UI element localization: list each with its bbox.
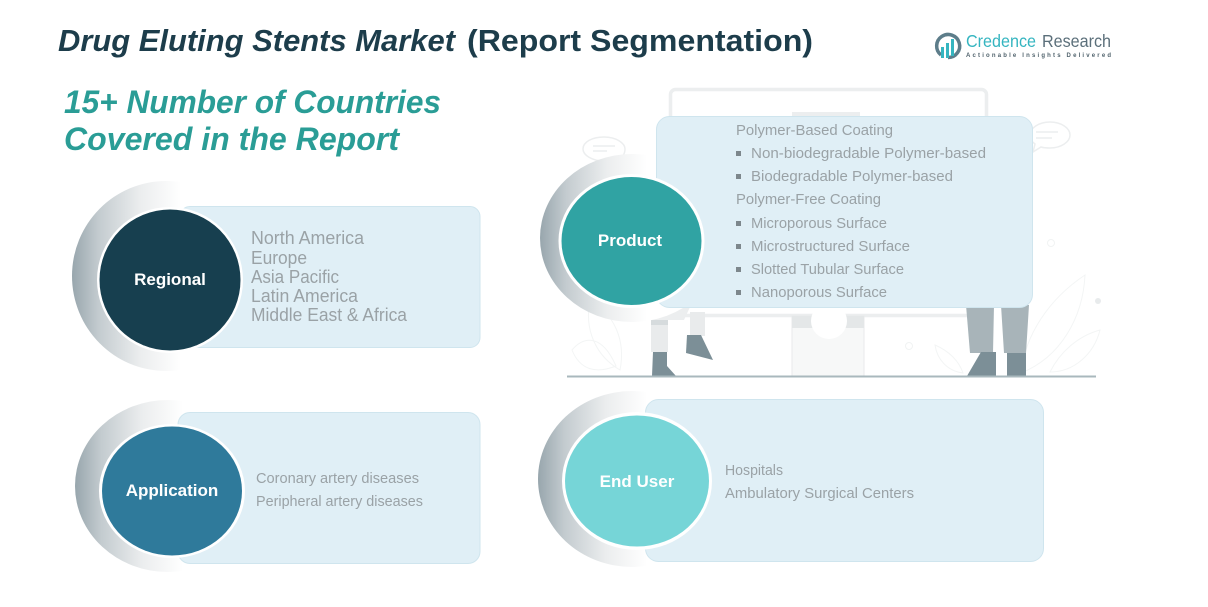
label: Application — [126, 481, 218, 500]
list: Non-biodegradable Polymer-based — [751, 145, 986, 162]
left person legs — [642, 307, 713, 376]
list: Coronary artery diseases — [256, 470, 419, 487]
list — [256, 470, 423, 510]
logo: Credence Research: Research — [1042, 31, 1111, 51]
panel: product — [540, 116, 1032, 322]
list: Microstructured Surface — [751, 238, 910, 255]
panel: application — [75, 400, 480, 572]
list: Nanoporous Surface — [751, 284, 887, 301]
icon: logo chart ring — [937, 35, 960, 58]
crescent — [540, 154, 724, 322]
leaves — [572, 275, 1100, 373]
panel: end user — [538, 391, 1044, 567]
list: North America — [251, 228, 365, 248]
logo: Credence Research: Actionable Insights Delivered — [966, 53, 1111, 59]
right person legs — [966, 305, 1029, 376]
circle — [562, 412, 712, 550]
label: End User — [600, 472, 675, 491]
text card — [646, 400, 1044, 562]
subtitle: countries covered — [64, 84, 441, 157]
title: (Report Segmentation) — [467, 23, 813, 58]
list: Biodegradable Polymer-based — [751, 168, 953, 185]
speech bubble left — [583, 137, 625, 166]
list: Slotted Tubular Surface — [751, 261, 904, 278]
list — [725, 462, 914, 502]
title: Drug Eluting Stents Market — [58, 23, 457, 58]
list: Ambulatory Surgical Centers — [725, 485, 914, 502]
list — [736, 122, 986, 301]
list: Middle East & Africa — [251, 305, 408, 325]
label: Regional — [134, 270, 206, 289]
circle — [558, 174, 704, 308]
list: Peripheral artery diseases — [256, 493, 423, 510]
subtitle: countries covered: 15+ Number of Countries — [64, 84, 441, 120]
monitor stand — [792, 316, 864, 376]
crescent — [72, 181, 260, 371]
list: Asia Pacific — [251, 267, 339, 287]
logo: Credence Research: Credence — [966, 31, 1036, 51]
ground line — [567, 376, 1096, 378]
list: Polymer-Free Coating — [736, 191, 881, 208]
crescent — [538, 391, 726, 567]
text card — [178, 412, 480, 564]
list: Microporous Surface — [751, 215, 887, 232]
list — [251, 228, 408, 325]
monitor frame — [670, 90, 986, 316]
list: Latin America — [251, 286, 359, 306]
list: Polymer-Based Coating — [736, 122, 893, 139]
panel: regional — [72, 181, 480, 371]
subtitle: countries covered: Covered in the Report — [64, 121, 400, 157]
list: Hospitals — [725, 462, 783, 479]
list: Europe — [251, 248, 307, 268]
crescent — [75, 400, 261, 572]
title — [58, 23, 813, 58]
label: Product — [598, 231, 662, 250]
illustration: people at monitor — [567, 90, 1101, 378]
text card — [180, 206, 480, 348]
logo: Credence Research — [937, 31, 1111, 59]
speech bubble right — [1030, 122, 1070, 152]
circle — [97, 207, 243, 353]
circle — [99, 424, 245, 558]
text card — [656, 116, 1032, 308]
